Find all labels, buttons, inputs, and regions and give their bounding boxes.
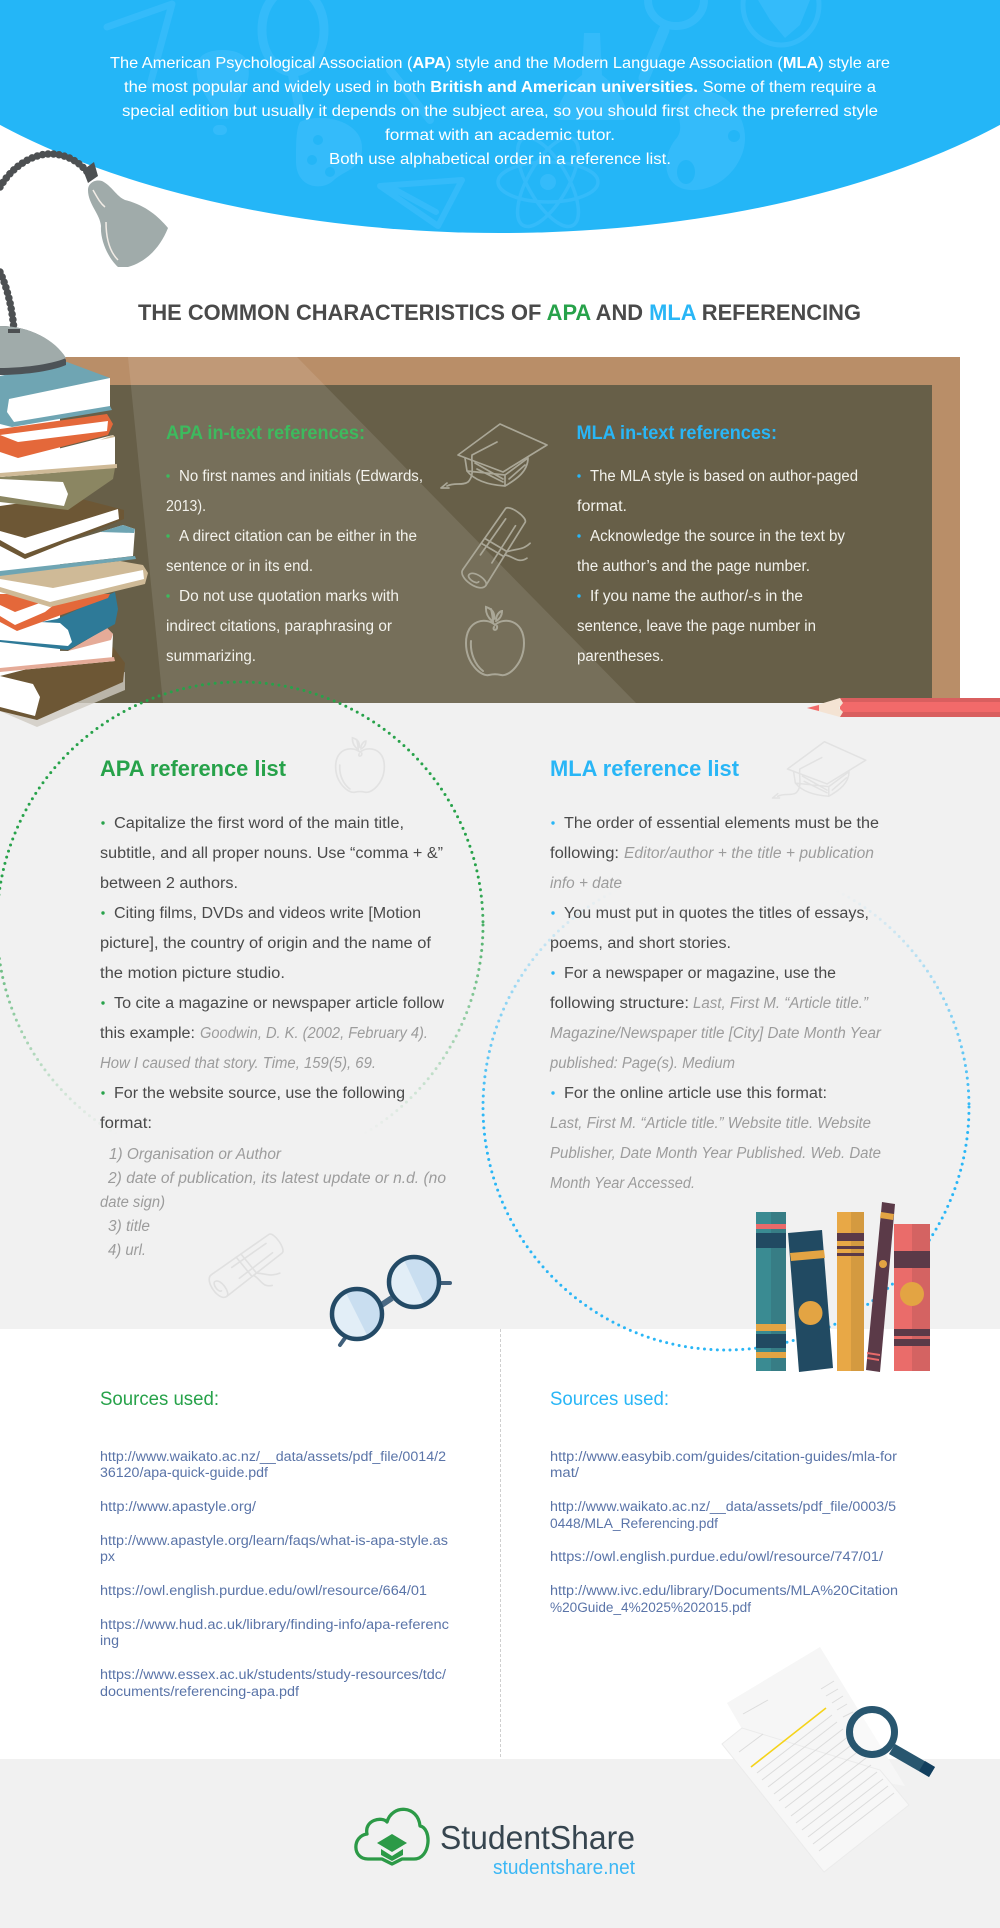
- text: APA reference list: between 2 authors.: [100, 875, 238, 892]
- text: MLA reference list: [549, 815, 882, 1192]
- text: MLA reference list: Last, First M. “Article title.”: [693, 995, 869, 1012]
- MLA sources: %20Guide_4%2025%202015.pdf: [550, 1600, 751, 1615]
- APA sources: https://www.essex.ac.uk/students/study-resources/tdc/: [100, 1667, 446, 1682]
- text: APA reference list: For the website source, use the following: [114, 1085, 405, 1102]
- icon: chalk apple: [466, 607, 524, 675]
- APA sources: Sources used:: [100, 1389, 219, 1410]
- APA sources: [100, 1389, 449, 1699]
- intro paragraph: [110, 55, 890, 168]
- MLA in-text references: MLA in-text references:: [576, 423, 777, 444]
- text: MLA reference list: info + date: [550, 875, 622, 892]
- APA in-text references: summarizing.: [166, 648, 256, 665]
- text: MLA reference list: published: Page(s). Medium: [549, 1055, 735, 1072]
- header: blue ellipse with faint icons: [0, 0, 1000, 235]
- icon: faint scroll: [206, 1232, 298, 1315]
- MLA sources: mat/: [550, 1465, 579, 1480]
- illustration: papers and magnifier: [722, 1647, 935, 1872]
- text: APA reference list: 4) url.: [108, 1242, 146, 1259]
- APA in-text references: [166, 423, 423, 665]
- APA in-text references: indirect citations, paraphrasing or: [166, 618, 392, 635]
- MLA sources: Sources used:: [550, 1389, 669, 1410]
- text: MLA reference list: Publisher, Date Month Year Published. Web. Date: [550, 1145, 881, 1162]
- APA sources: documents/referencing-apa.pdf: [100, 1684, 299, 1699]
- dotted circle: MLA: [483, 864, 969, 1350]
- text: APA reference list: How I caused that story. Time, 159(5), 69.: [100, 1055, 376, 1072]
- MLA in-text references: If you name the author/-s in the: [590, 588, 803, 605]
- MLA in-text references: parentheses.: [577, 648, 664, 665]
- APA sources: 36120/apa-quick-guide.pdf: [100, 1465, 268, 1480]
- logo: StudentShare: [356, 1809, 635, 1879]
- intro paragraph: Both use alphabetical order in a reference list.: [329, 151, 671, 168]
- MLA sources: http://www.easybib.com/guides/citation-guides/mla-for: [550, 1449, 898, 1464]
- text: MLA reference list: For the online article use this format:: [564, 1085, 827, 1102]
- intro paragraph: special edition but usually it depends on the subject area, so you should first check the preferred style: [122, 103, 878, 120]
- intro paragraph: format with an academic tutor.: [385, 127, 615, 144]
- APA sources: https://owl.english.purdue.edu/owl/resource/664/01: [100, 1583, 427, 1598]
- MLA sources: http://www.waikato.ac.nz/__data/assets/pdf_file/0003/5: [550, 1499, 896, 1514]
- intro paragraph: The American Psychological Association ( APA) style and the Modern Language Association ( MLA) style are: [110, 55, 890, 72]
- APA sources: http://www.waikato.ac.nz/__data/assets/pdf_file/0014/2: [100, 1449, 446, 1464]
- text: APA reference list: subtitle, and all proper nouns. Use “comma + &”: [100, 845, 443, 862]
- APA in-text references: sentence or in its end.: [166, 558, 313, 575]
- panel: chalkboard: [60, 357, 960, 703]
- background: grey reference list section: [0, 703, 1000, 1329]
- text: APA reference list: the motion picture studio.: [100, 965, 285, 982]
- icon: chalk graduation cap: [441, 424, 547, 488]
- dotted circle: APA: [0, 682, 483, 1168]
- text: APA reference list: 2) date of publication, its latest update or n.d. (no: [107, 1170, 446, 1187]
- logo: StudentShare: studentshare.net: [493, 1857, 635, 1879]
- illustration: red pencil: [807, 698, 1000, 717]
- text: MLA reference list: The order of essential elements must be the: [564, 815, 879, 832]
- MLA sources: 0448/MLA_Referencing.pdf: [550, 1516, 718, 1531]
- APA sources: https://www.hud.ac.uk/library/finding-info/apa-referenc: [100, 1617, 449, 1632]
- illustration: desk lamp: [0, 154, 168, 375]
- icon: chalk diploma scroll: [459, 505, 546, 602]
- background: footer band: [0, 1759, 1000, 1928]
- title: THE COMMON CHARACTERISTICS OF APA AND MLA REFERENCING: [138, 300, 861, 325]
- text: APA reference list: Citing films, DVDs and videos write [Motion: [114, 905, 421, 922]
- icon: faint graduation cap: [772, 742, 866, 798]
- text: APA reference list: Goodwin, D. K. (2002, February 4).: [200, 1025, 428, 1042]
- illustration: stack of books: [0, 362, 148, 727]
- icon: glasses: [332, 1256, 450, 1345]
- MLA sources: https://owl.english.purdue.edu/owl/resource/747/01/: [550, 1549, 883, 1564]
- MLA in-text references: sentence, leave the page number in: [577, 618, 816, 635]
- APA sources: ing: [100, 1633, 119, 1648]
- text: MLA reference list: You must put in quotes the titles of essays,: [564, 905, 869, 922]
- APA in-text references: Do not use quotation marks with: [179, 588, 399, 605]
- text: APA reference list: [100, 815, 446, 1259]
- text: APA reference list: date sign): [100, 1194, 165, 1211]
- icon: faint apple: [336, 738, 384, 792]
- text: APA reference list: Capitalize the first word of the main title,: [114, 815, 404, 832]
- text: MLA reference list: Last, First M. “Article title.” Website title. Website: [550, 1115, 871, 1132]
- text: APA reference list: To cite a magazine or newspaper article follow: [114, 995, 445, 1012]
- APA in-text references: APA in-text references:: [166, 423, 365, 444]
- text: APA reference list: format:: [100, 1115, 152, 1132]
- MLA in-text references: [576, 423, 858, 665]
- MLA sources: [550, 1389, 898, 1615]
- APA in-text references: A direct citation can be either in the: [179, 528, 417, 545]
- APA sources: http://www.apastyle.org/: [100, 1499, 256, 1514]
- APA sources: http://www.apastyle.org/learn/faqs/what-is-apa-style.as: [100, 1533, 448, 1548]
- heading: APA reference list: APA reference list: [100, 756, 287, 781]
- text: MLA reference list: Editor/author + the title + publication: [624, 845, 874, 862]
- MLA sources: http://www.ivc.edu/library/Documents/MLA%20Citation: [550, 1583, 898, 1598]
- heading: MLA reference list: MLA reference list: [550, 756, 740, 781]
- divider: dashed vertical line: [500, 1329, 502, 1759]
- MLA in-text references: format.: [577, 498, 627, 515]
- MLA in-text references: Acknowledge the source in the text by: [590, 528, 845, 545]
- intro paragraph: the most popular and widely used in both British and American universities. Some of them require a: [124, 79, 876, 96]
- APA sources: px: [100, 1549, 115, 1564]
- illustration: upright books: [756, 1202, 930, 1372]
- MLA in-text references: the author’s and the page number.: [577, 558, 810, 575]
- text: MLA reference list: following:: [550, 845, 619, 862]
- text: APA reference list: this example:: [100, 1025, 195, 1042]
- text: MLA reference list: Month Year Accessed.: [550, 1175, 695, 1192]
- icon: cloud with graduation cap: [356, 1809, 428, 1864]
- text: APA reference list: picture], the country of origin and the name of: [100, 935, 432, 952]
- APA in-text references: 2013).: [166, 498, 206, 515]
- APA in-text references: No first names and initials (Edwards,: [179, 468, 423, 485]
- text: MLA reference list: Magazine/Newspaper title [City] Date Month Year: [550, 1025, 882, 1042]
- text: MLA reference list: following structure:: [550, 995, 689, 1012]
- text: APA reference list: 3) title: [108, 1218, 150, 1235]
- text: MLA reference list: poems, and short stories.: [550, 935, 731, 952]
- text: MLA reference list: For a newspaper or magazine, use the: [564, 965, 836, 982]
- text: APA reference list: 1) Organisation or Author: [109, 1146, 282, 1163]
- logo: StudentShare: StudentShare: [440, 1819, 635, 1856]
- MLA in-text references: The MLA style is based on author-paged: [590, 468, 858, 485]
